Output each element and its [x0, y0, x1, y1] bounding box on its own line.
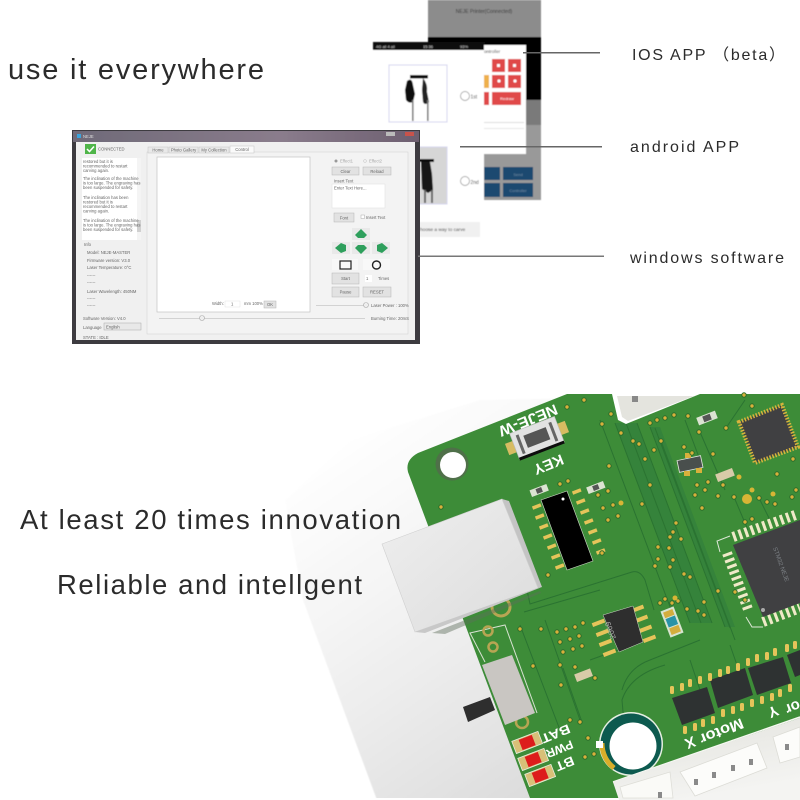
switch outline and pads	[470, 625, 537, 728]
message log: recommended to restart	[83, 204, 128, 209]
windows software window: NEJE	[83, 134, 94, 139]
grey background shading behind board	[305, 518, 530, 798]
message log: is too large. The engraving has	[83, 180, 140, 186]
android status bar: 15:36	[423, 44, 434, 49]
board label: NEJE-W: NEJE-W	[495, 400, 560, 440]
power switch	[463, 655, 535, 725]
control buttons: Insert Text	[334, 178, 354, 184]
small chip 2069: 2069	[603, 620, 618, 640]
circuit board	[382, 393, 800, 800]
tab bar: My Collection	[201, 148, 227, 152]
control buttons	[332, 158, 391, 297]
connected status	[85, 144, 125, 154]
connected status: CONNECTED	[98, 146, 125, 152]
green direction arrows	[332, 228, 390, 254]
bright gold via pads	[618, 474, 776, 600]
board label: Motor: Motor	[697, 714, 746, 747]
control buttons: Font	[340, 215, 349, 220]
message log: recommended to restart	[83, 164, 128, 168]
info list: Firmware version: V3.0	[87, 258, 131, 263]
board label: BAT: BAT	[539, 721, 572, 746]
gold ring behind USB	[492, 598, 510, 616]
info list: STATE : IDLE	[83, 335, 109, 340]
top white connector	[612, 394, 700, 424]
message log: is too large. The engraving has	[83, 222, 140, 228]
board label: X: X	[682, 732, 698, 752]
darker bus band	[615, 423, 712, 623]
android white screen	[373, 50, 484, 240]
white engraving canvas: Width:	[212, 301, 224, 306]
message log: carving again.	[83, 168, 109, 173]
subheading: Reliable and intellgent: Reliable and intellgent	[57, 569, 362, 600]
board label: BT: BT	[553, 753, 576, 774]
USB connector	[382, 499, 542, 634]
tab bar: Control	[235, 147, 249, 152]
white engraving canvas: OK	[267, 302, 273, 307]
frame and circle tool buttons	[332, 259, 390, 270]
option marker 2nd	[460, 176, 479, 186]
black IC with pins	[532, 488, 606, 570]
choose a way bar	[418, 222, 480, 237]
info list: ------	[87, 280, 96, 285]
message log: been suspended for safety.	[83, 185, 133, 190]
white engraving canvas: 1	[231, 302, 234, 306]
message log: The inclination of the machine	[83, 218, 139, 223]
info list: Software Version: V4.0	[83, 316, 126, 321]
controller panel with red buttons: Redraw	[500, 96, 514, 101]
option marker 1st: 1st	[470, 94, 478, 100]
small QFP chip	[739, 405, 798, 463]
connector line: windows	[418, 256, 604, 257]
control buttons: 1	[366, 276, 369, 281]
choose a way bar: hoose a way to carve	[420, 227, 466, 233]
info list: Laser Temperature: 0°C	[87, 265, 131, 270]
info list: ------	[87, 303, 96, 308]
SOT chip	[677, 453, 703, 476]
large processor chip: STM32 NEJE	[771, 547, 789, 583]
heading: use it everywhere: use it everywhere	[8, 54, 264, 86]
bottom white connectors	[613, 717, 800, 800]
info list: ------	[87, 273, 96, 278]
control buttons: Times	[378, 276, 389, 281]
carving image 1st	[389, 65, 447, 122]
iOS phone screen: Controller	[509, 188, 527, 193]
info list: Laser Wavelength: 450NM	[87, 289, 137, 294]
capacitor	[596, 712, 663, 776]
android status bar: 93%	[460, 44, 468, 49]
white engraving canvas	[157, 157, 310, 312]
message log: been suspended for safety.	[83, 227, 133, 232]
connector line: android	[460, 146, 602, 148]
control buttons: Effect2	[369, 158, 383, 164]
white engraving canvas: mm 100%	[244, 301, 263, 306]
heading: At least 20 times innovation: At least 20 times innovation	[20, 504, 401, 535]
control buttons: RESET	[370, 290, 384, 294]
android status bar	[373, 42, 485, 50]
driver chips row	[672, 650, 800, 725]
control buttons: Reload	[370, 169, 384, 174]
LED indicators	[512, 731, 556, 787]
key button	[502, 413, 572, 463]
control buttons: Start	[341, 276, 351, 281]
controller panel with red buttons: ontroller	[484, 49, 501, 54]
label: android app: android APP	[630, 139, 739, 156]
control buttons: Enter Text Here...	[334, 186, 367, 190]
board label: PWR: PWR	[544, 737, 575, 761]
small chip 2069	[592, 605, 656, 657]
board label: KEY: KEY	[531, 450, 566, 478]
label: iOS app: IOS APP （beta）	[632, 46, 785, 64]
board body	[407, 394, 800, 798]
message log: restored but it is	[83, 200, 113, 204]
label: windows software: windows software	[629, 250, 784, 267]
carving image 2nd	[410, 147, 447, 204]
solder pads	[439, 393, 798, 759]
bottom sliders: Laser Power : 100%	[371, 303, 409, 308]
bottom sliders: Burning Time: 20mS	[371, 316, 409, 321]
info list: English	[106, 324, 120, 330]
option marker 1st	[460, 92, 478, 100]
message log	[82, 158, 141, 240]
board label: Y: Y	[765, 701, 781, 721]
phone screenshots: iOS and android apps	[373, 0, 541, 240]
control buttons: Clear	[340, 169, 351, 174]
message log: The inclination of the machine	[83, 176, 139, 181]
option marker 2nd: 2nd	[470, 180, 479, 186]
android status bar: 4G all 4 all	[376, 44, 395, 49]
bottom sliders	[159, 302, 409, 321]
control buttons: Insert Text	[366, 215, 386, 220]
small resistor	[660, 606, 684, 638]
circuit traces	[520, 400, 770, 735]
tab bar: Home	[152, 148, 164, 152]
info list: Info	[84, 242, 92, 247]
iOS phone screen: Send	[513, 172, 523, 177]
control buttons: Pause	[340, 290, 352, 294]
tab bar: Photo Gallery	[171, 148, 197, 152]
info list: Model: NEJE-MASTER	[87, 250, 130, 255]
connector line: iOS	[523, 52, 600, 54]
mounting hole	[436, 448, 468, 480]
info list	[83, 242, 141, 340]
message log: The inclination has been	[83, 195, 129, 200]
info list: Language	[83, 325, 102, 330]
control buttons: Effect1	[340, 158, 354, 164]
windows software window	[72, 130, 420, 344]
driver pins and pads	[670, 641, 797, 734]
iOS phone screen	[428, 0, 541, 200]
message log: carving again.	[83, 208, 109, 214]
message log: restored but it is	[83, 159, 113, 164]
info list: ------	[87, 296, 96, 301]
controller panel with red buttons	[484, 45, 526, 154]
iOS phone screen: NEJE Printer(Connected)	[456, 9, 513, 15]
tab bar	[147, 146, 408, 334]
small resistors on board	[530, 411, 735, 682]
large processor chip	[717, 514, 800, 627]
